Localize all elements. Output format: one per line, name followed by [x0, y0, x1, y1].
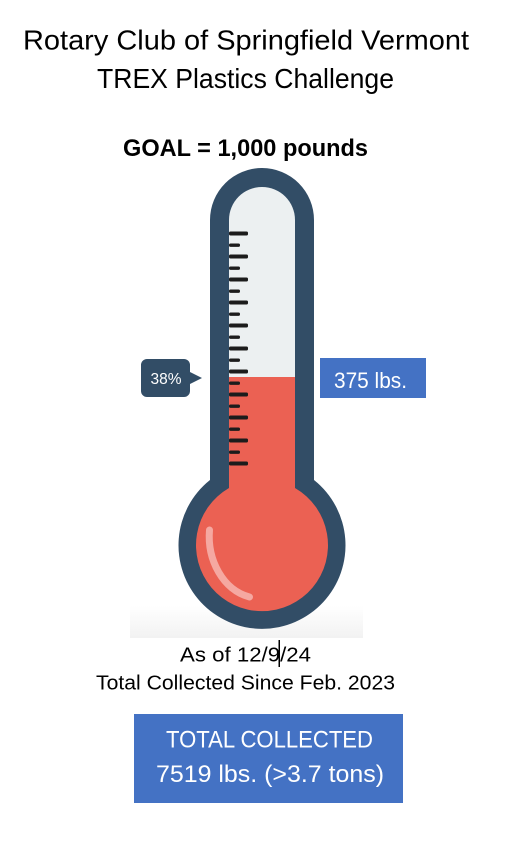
floor shadow	[130, 606, 363, 638]
percent callout: 38%	[150, 371, 182, 388]
bulb highlight	[209, 530, 250, 597]
thermometer empty tube	[229, 187, 295, 377]
scale ticks	[229, 232, 248, 466]
total collected since note: Total Collected Since Feb. 2023	[96, 672, 395, 694]
thermometer casing	[179, 168, 346, 629]
current amount box	[320, 358, 426, 398]
percent callout	[141, 359, 202, 397]
total collected box: 7519 lbs. (>3.7 tons)	[156, 761, 384, 788]
total collected box	[134, 714, 403, 803]
current amount box: 375 lbs.	[334, 368, 407, 393]
title: TREX Plastics Challenge	[97, 63, 394, 94]
goal heading: GOAL = 1,000 pounds	[123, 135, 368, 162]
as-of date: As of 12/9/24	[180, 644, 311, 666]
title: Rotary Club of Springfield Vermont	[23, 24, 469, 56]
thermometer red fill	[196, 377, 328, 611]
thermometer	[179, 168, 346, 629]
total collected box: TOTAL COLLECTED	[166, 726, 373, 754]
title	[23, 24, 469, 94]
